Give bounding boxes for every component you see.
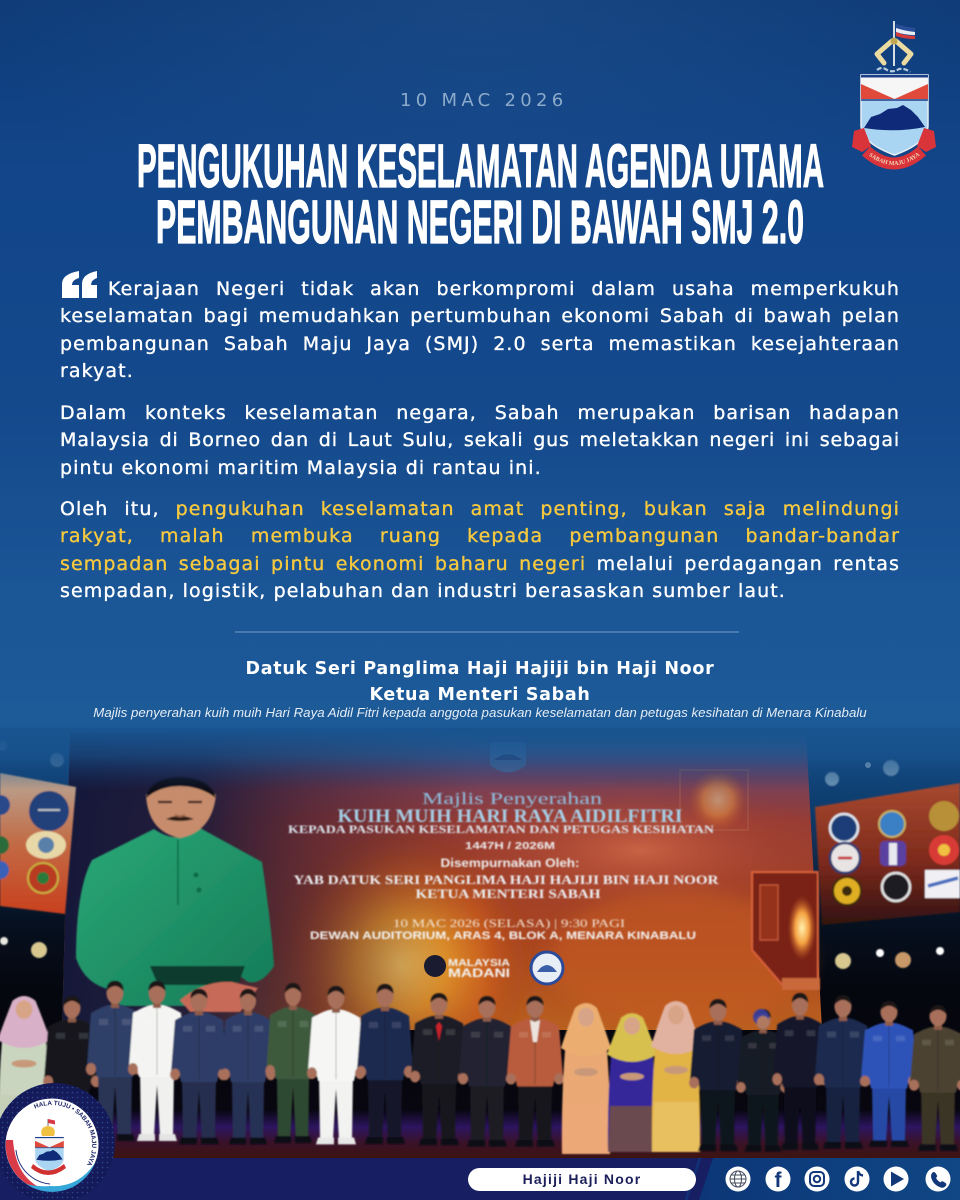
fade from background into photo bbox=[0, 728, 960, 790]
hands bbox=[877, 41, 911, 63]
screen text: 10 MAC 2026 (SELASA) | 9:30 PAGI bbox=[393, 916, 625, 930]
lantern bbox=[752, 872, 820, 990]
person: officer dark navy bbox=[356, 984, 414, 1144]
person: officer khaki bbox=[909, 1005, 960, 1151]
paragraph 3 with highlight: sempadan sebagai pintu ekonomi baharu negeri melalui perdagangan rentas bbox=[60, 553, 900, 575]
person: officer dark bbox=[772, 993, 828, 1150]
screen text: Disempurnakan Oleh: bbox=[440, 856, 580, 870]
person: woman officer blue hijab bbox=[736, 1009, 790, 1152]
screen text: MALAYSIA bbox=[448, 958, 510, 969]
logo: Hala Tuju Sabah Maju Jaya badge bbox=[0, 1083, 115, 1200]
divider bbox=[235, 631, 739, 633]
person: army officer green bbox=[265, 983, 321, 1143]
screen text: 1447H / 2026M bbox=[465, 840, 555, 852]
flag bbox=[894, 21, 915, 66]
screen logos bbox=[424, 742, 563, 984]
screen text: DEWAN AUDITORIUM, ARAS 4, BLOK A, MENARA KINABALU bbox=[310, 930, 696, 942]
ribbon bbox=[852, 128, 936, 170]
paragraph 3 with highlight: rakyat, malah membuka ruang kepada pembangunan bandar-bandar bbox=[60, 525, 900, 547]
paragraph 3 with highlight: sempadan, logistik, pelabuhan dan industri berasaskan sumber laut. bbox=[60, 580, 786, 602]
paragraph 1 bbox=[60, 278, 900, 382]
icon: tiktok bbox=[844, 1166, 870, 1192]
person: man in black suit bbox=[410, 993, 468, 1145]
speaker name and role: Datuk Seri Panglima Haji Hajiji bin Haji Noor bbox=[246, 659, 714, 679]
date: 10 MAC 2026 bbox=[400, 90, 568, 111]
ribbon: SABAH MAJU JAYA bbox=[869, 152, 920, 166]
person: officer blue-black bbox=[814, 995, 872, 1149]
footer band bbox=[0, 1158, 960, 1200]
icon: facebook bbox=[766, 1166, 790, 1192]
person: air officer navy bbox=[220, 989, 276, 1144]
photo: stage floor bbox=[0, 1030, 960, 1158]
paragraph 1: Kerajaan Negeri tidak akan berkompromi dalam usaha memperkukuh bbox=[108, 278, 900, 300]
photo: portrait of chief minister on screen bbox=[76, 777, 274, 1012]
footer name pill bbox=[468, 1168, 696, 1191]
paragraph 3 with highlight bbox=[60, 498, 900, 602]
quote mark icon bbox=[62, 271, 97, 298]
paragraph 2: Malaysia di Borneo dan di Laut Sulu, sekali gus meletakkan negeri ini sebagai bbox=[60, 429, 900, 451]
screen text: KUIH MUIH HARI RAYA AIDILFITRI bbox=[338, 806, 682, 827]
icon: youtube play bbox=[884, 1166, 908, 1192]
footer name pill: Hajiji Haji Noor bbox=[523, 1171, 641, 1187]
speaker name and role bbox=[246, 659, 714, 705]
person: officer bright blue bbox=[860, 1001, 918, 1147]
crest: Sabah state coat of arms bbox=[852, 21, 936, 170]
screen text: YAB DATUK SERI PANGLIMA HAJI HAJIJI BIN HAJI NOOR bbox=[294, 872, 719, 887]
person: officer black uniform bbox=[43, 996, 101, 1151]
paragraph 1: keselamatan bagi memudahkan pertumbuhan ekonomi Sabah di bawah pelan bbox=[60, 305, 900, 327]
icon: instagram bbox=[804, 1166, 830, 1192]
title bbox=[137, 132, 824, 256]
shield bbox=[861, 75, 928, 155]
photo: line-up of guests bbox=[0, 981, 960, 1154]
photo: left stage panel with emblems bbox=[0, 773, 76, 914]
paragraph 2: Dalam konteks keselamatan negara, Sabah merupakan barisan hadapan bbox=[60, 402, 900, 424]
icon: facebook: f bbox=[774, 1169, 782, 1192]
photo: right stage panel with emblems bbox=[815, 783, 960, 925]
speaker name and role: Ketua Menteri Sabah bbox=[369, 685, 591, 705]
paragraph 2 bbox=[60, 402, 900, 479]
person: officer navy uniform bbox=[86, 981, 144, 1141]
person: air officer navy bbox=[170, 989, 228, 1144]
person: woman in purple dress bbox=[607, 1013, 657, 1152]
person: woman in pink hijab bbox=[0, 996, 50, 1144]
person: man in dark suit bbox=[458, 996, 516, 1147]
screen text bbox=[288, 789, 719, 980]
screen text: Majlis Penyerahan bbox=[422, 789, 603, 808]
photo: main LED screen bbox=[62, 732, 830, 1100]
person: man in terracotta jacket bbox=[506, 996, 564, 1147]
screen text: KETUA MENTERI SABAH bbox=[416, 886, 600, 901]
screen text: MADANI bbox=[448, 966, 510, 980]
person: woman in yellow dress bbox=[651, 1001, 701, 1152]
person: naval officer white bbox=[307, 986, 365, 1144]
icon: phone bbox=[926, 1166, 950, 1192]
paragraph 3 with highlight: Oleh itu, pengukuhan keselamatan amat penting, bukan saja melindungi bbox=[60, 498, 900, 520]
logo: Hala Tuju Sabah Maju Jaya badge: HALA TUJU • SABAH MAJU JAYA bbox=[34, 1100, 96, 1166]
screen text: KEPADA PASUKAN KESELAMATAN DAN PETUGAS KESIHATAN bbox=[288, 824, 715, 836]
paragraph 1: rakyat. bbox=[60, 360, 134, 382]
person: naval officer white bbox=[128, 981, 186, 1141]
photo: stage backdrop bbox=[0, 730, 960, 1160]
caption: Majlis penyerahan kuih muih Hari Raya Aidil Fitri kepada anggota pasukan keselamatan dan petugas kesihatan di Menara Kinabalu bbox=[93, 705, 867, 720]
person: officer dark navy bbox=[689, 999, 747, 1151]
paragraph 2: pintu ekonomi maritim Malaysia di rantau ini. bbox=[60, 457, 542, 479]
person: woman in peach dress bbox=[561, 1003, 611, 1154]
paragraph 1: pembangunan Sabah Maju Jaya (SMJ) 2.0 serta memastikan kesejahteraan bbox=[60, 333, 900, 355]
icon: website globe bbox=[726, 1166, 750, 1192]
